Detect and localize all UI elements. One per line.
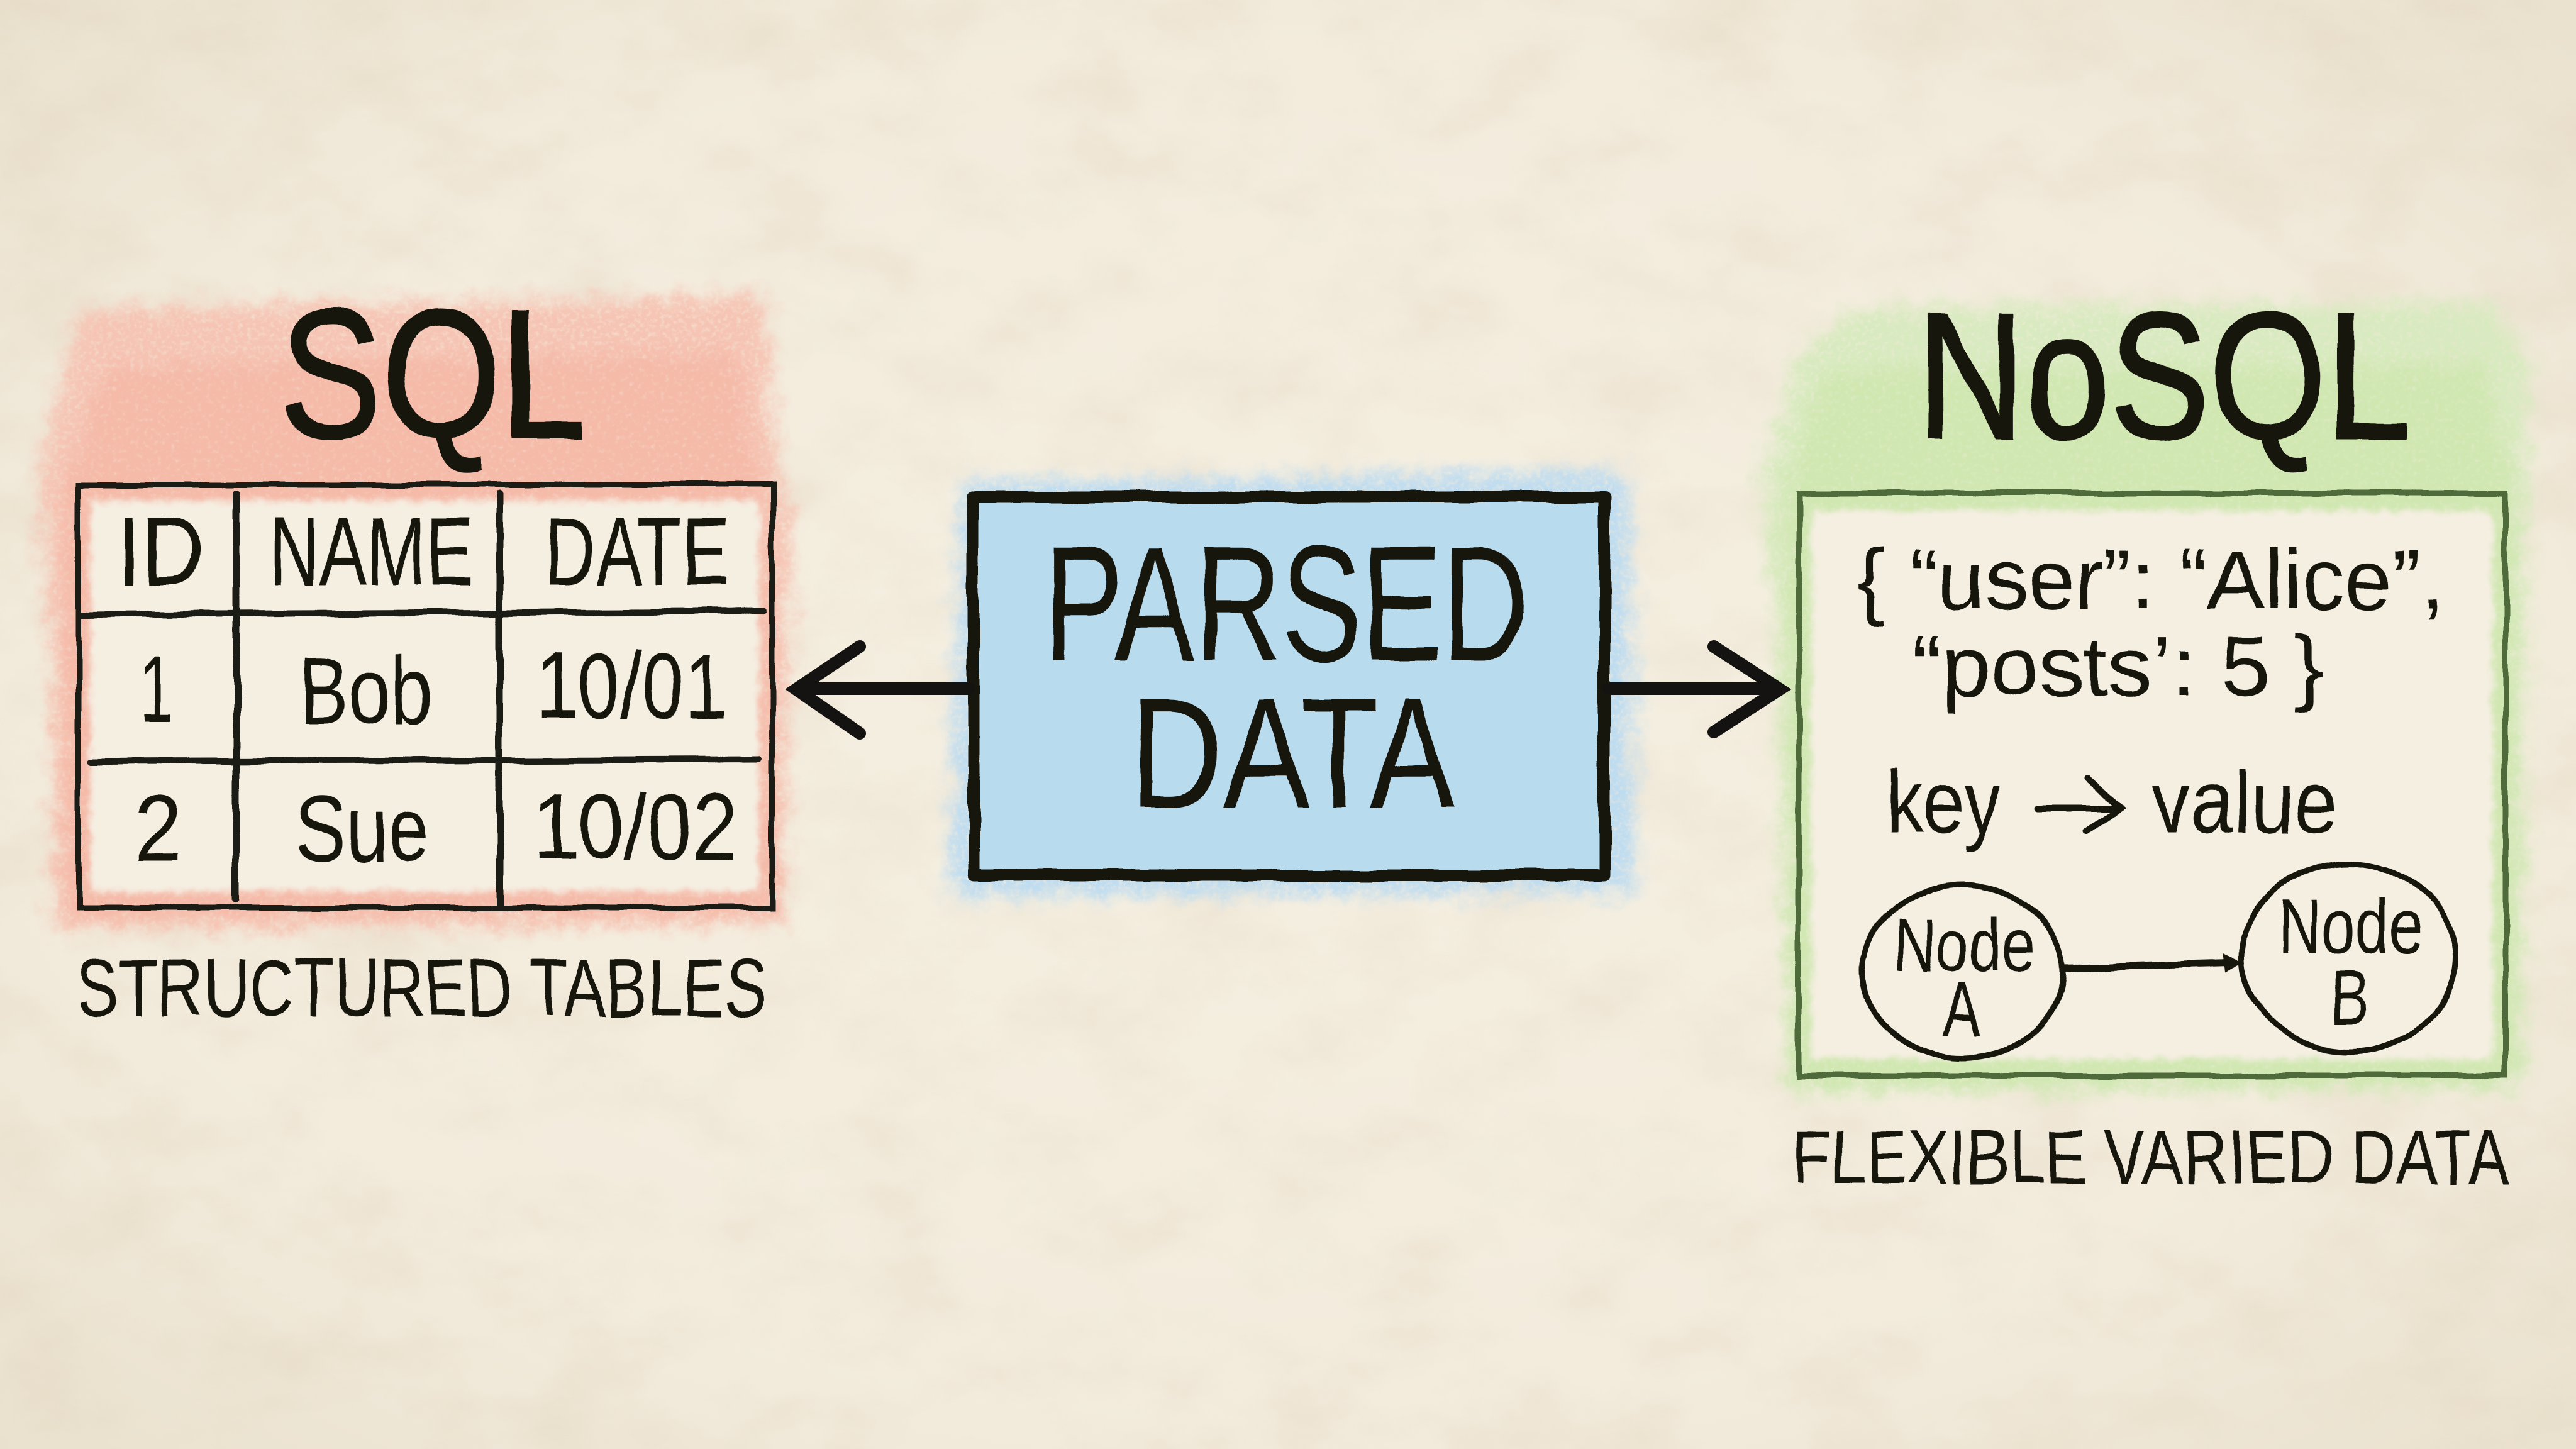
node A: A: [1942, 966, 1981, 1052]
box outline: [1799, 493, 2506, 1075]
row 2: 2: [135, 775, 182, 881]
row 2: [135, 774, 737, 881]
table interior: [90, 501, 759, 892]
header row: ID: [116, 497, 205, 606]
panel: NoSQL: [1761, 276, 2528, 1200]
arrow: parsed data to SQL: [796, 647, 969, 733]
header row: NAME: [268, 497, 474, 606]
node A: Node: [1894, 902, 2035, 987]
DATA label: DATA: [1130, 665, 1455, 841]
row 1: Bob: [299, 638, 432, 743]
JSON snippet: “posts’: 5 }: [1912, 619, 2324, 714]
NoSQL title: NoSQL: [1917, 276, 2410, 476]
node link arrow: [2063, 954, 2243, 973]
green crayon wash outer: [1761, 302, 2528, 1091]
document interior: [1811, 511, 2493, 1059]
key value row: key: [1886, 752, 2001, 852]
arrow: parsed data to NoSQL: [1609, 647, 1780, 732]
node B: [2242, 863, 2456, 1052]
JSON snippet: { “user”: “Alice”,: [1857, 532, 2444, 627]
header row: DATE: [544, 497, 729, 606]
key value row: value: [2152, 752, 2337, 852]
panel: parsed data: [950, 472, 1635, 896]
parsed data box: [974, 497, 1604, 875]
row 1: 10/01: [535, 633, 726, 738]
JSON snippet: [1857, 532, 2444, 714]
blue crayon wash: [950, 472, 1635, 896]
red crayon wash outer: [39, 296, 791, 930]
key value row: [1886, 752, 2337, 852]
node B: B: [2331, 954, 2370, 1040]
blue solid fill: [976, 501, 1602, 873]
table grid: [79, 485, 772, 908]
structured table: [79, 485, 772, 908]
row 2: 10/02: [533, 774, 737, 879]
panel: SQL: [39, 272, 791, 1034]
row 2: Sue: [296, 775, 430, 881]
SQL title: SQL: [280, 272, 586, 476]
PARSED label: PARSED: [1044, 511, 1528, 696]
header row: [116, 497, 729, 606]
node A: [1862, 886, 2063, 1058]
node B: Node: [2277, 884, 2423, 969]
row 1: [140, 633, 726, 743]
row 1: 1: [140, 636, 174, 741]
SQL caption: STRUCTURED TABLES: [77, 941, 767, 1034]
green crayon wash core: [1786, 365, 2516, 1085]
box outline: [974, 497, 1604, 875]
flexible data box: [1799, 493, 2506, 1075]
red crayon wash core: [63, 352, 777, 917]
